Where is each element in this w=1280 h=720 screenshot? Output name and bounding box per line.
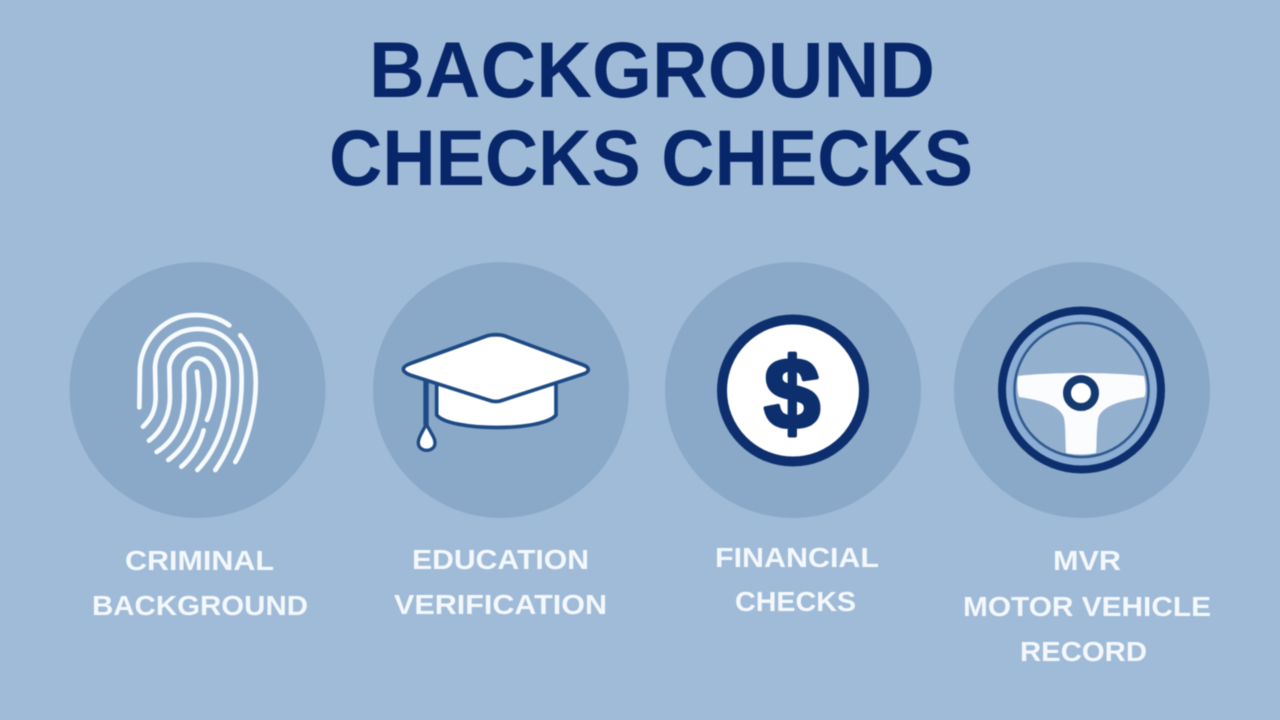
icon: dollar coin: $: [764, 338, 820, 450]
icon: fingerprint: [139, 315, 256, 470]
label: financial checks: CHECKS: [735, 586, 856, 617]
label: financial checks: FINANCIAL: [715, 542, 879, 573]
label: criminal background: BACKGROUND: [92, 590, 308, 621]
icon circle: criminal background: [70, 262, 326, 518]
panel: financial checks: [665, 262, 921, 617]
icon circle: motor vehicle record: [954, 262, 1210, 518]
title: CHECKS CHECKS: [329, 113, 973, 202]
label: criminal background: CRIMINAL: [125, 545, 274, 576]
icon: graduation cap: [403, 335, 588, 450]
panel: education verification: [373, 262, 629, 620]
label: financial checks: [715, 542, 879, 617]
icon: dollar coin: [722, 320, 864, 462]
panel: motor vehicle record: [954, 262, 1211, 667]
icon circle: education verification: [373, 262, 629, 518]
title: BACKGROUND: [369, 25, 935, 114]
title: [329, 25, 973, 202]
panel: criminal background: [70, 262, 326, 621]
label: motor vehicle record: MVR: [1053, 545, 1121, 576]
label: education verification: [394, 544, 607, 620]
label: motor vehicle record: [963, 545, 1211, 667]
label: education verification: VERIFICATION: [394, 589, 607, 620]
label: motor vehicle record: MOTOR VEHICLE: [963, 591, 1211, 622]
label: motor vehicle record: RECORD: [1020, 636, 1147, 667]
icon: steering wheel: [1002, 310, 1161, 470]
label: criminal background: [92, 545, 308, 621]
label: education verification: EDUCATION: [412, 544, 589, 575]
icon circle: financial checks: [665, 262, 921, 518]
